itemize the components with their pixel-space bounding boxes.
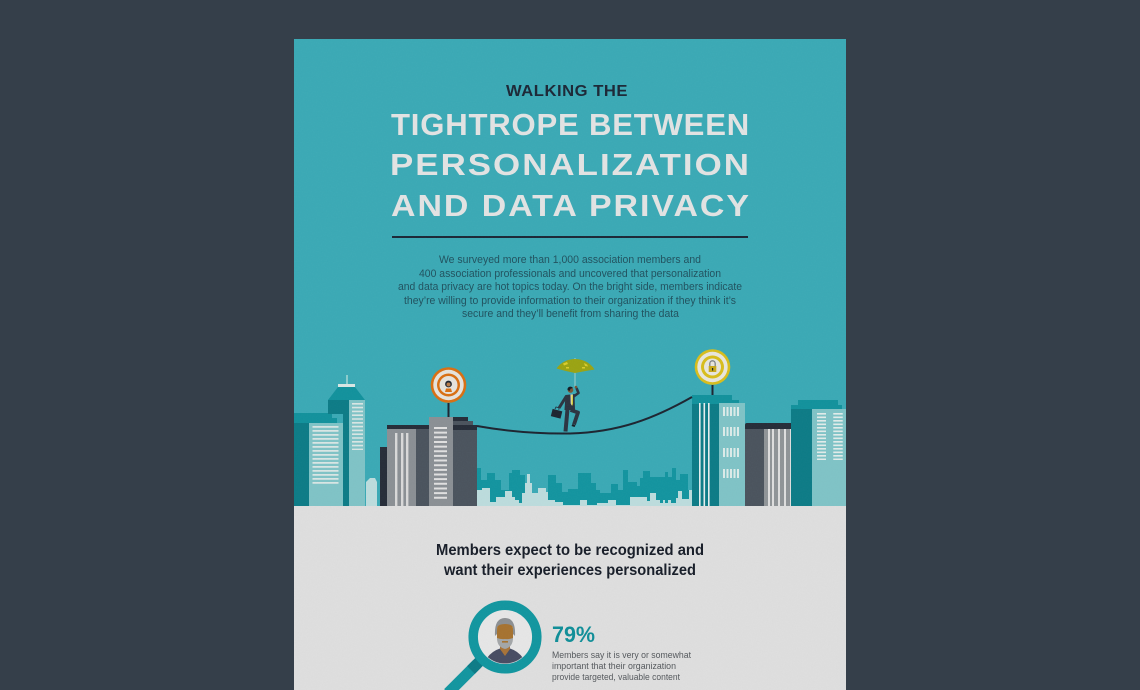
stat description: important that their organization: [552, 661, 676, 672]
kicker: walking the: WALKING THE: [506, 83, 628, 100]
arms: [559, 396, 566, 408]
torso: [564, 394, 575, 410]
target: person icon: [431, 367, 466, 417]
panel: teal hero: [294, 39, 846, 507]
briefcase: [551, 407, 562, 419]
target: padlock icon: [695, 349, 730, 395]
head: [568, 387, 573, 393]
building: left teal block: [294, 413, 343, 506]
building: left tower: [328, 375, 365, 506]
intro paragraph: they’re willing to provide information to their organization if they think it’s: [404, 295, 736, 307]
icon: magnifying glass with member portrait: [448, 605, 537, 690]
tightrope: [477, 397, 692, 434]
distant skyline: pale: [477, 474, 692, 506]
panel: grey section: [294, 506, 846, 690]
shirt and tie: [570, 394, 573, 406]
small pale tower: [366, 478, 377, 506]
illustration: city skyline and tightrope: [294, 349, 846, 506]
tightrope walker with umbrella: [551, 358, 594, 432]
stat description: [552, 650, 691, 683]
section heading: want their experiences personalized: [443, 562, 696, 579]
intro paragraph: 400 association professionals and uncovered that personalization: [419, 268, 721, 280]
section heading: Members expect to be recognized and: [436, 542, 704, 559]
section heading: [436, 542, 704, 579]
heading line 2: PERSONALIZATION: [390, 147, 751, 182]
stat value: 79%: [552, 622, 595, 647]
distant skyline: dark teal: [477, 468, 692, 506]
intro paragraph: [398, 254, 742, 320]
title block: [390, 83, 751, 223]
stat description: Members say it is very or somewhat: [552, 650, 691, 661]
building: grey block right: [745, 423, 791, 506]
businessman: [559, 386, 578, 432]
legs: [566, 409, 568, 432]
stat: 79%: [552, 622, 691, 683]
stat description: provide targeted, valuable content: [552, 672, 680, 683]
title rule: [392, 236, 748, 238]
member portrait: [488, 618, 522, 664]
heading line 3: AND DATA PRIVACY: [391, 188, 751, 223]
heading line 1: TIGHTROPE BETWEEN: [391, 107, 750, 142]
building: right teal tower: [791, 400, 846, 506]
umbrella: [556, 358, 594, 387]
magnifier lens: [473, 605, 537, 669]
intro paragraph: and data privacy are hot topics today. On the bright side, members indicate: [398, 281, 742, 293]
intro paragraph: secure and they’ll benefit from sharing the data: [462, 308, 680, 320]
magnifier handle: [448, 661, 480, 690]
intro paragraph: We surveyed more than 1,000 association members and: [439, 254, 701, 266]
building: dark grey block with rope anchor: [380, 417, 477, 506]
building: teal block with lock target: [692, 395, 745, 506]
